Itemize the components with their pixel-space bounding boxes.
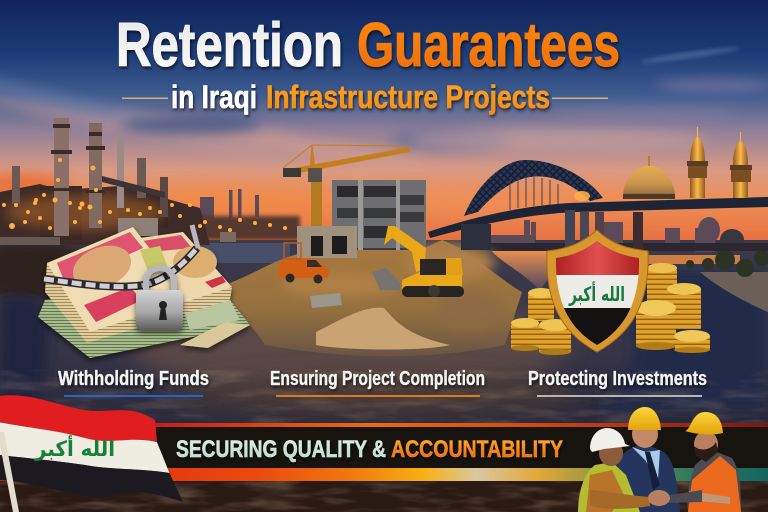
flag pole (0, 432, 19, 512)
icon: chained money stack (38, 227, 250, 358)
worker: white helmet and yellow vest (578, 428, 650, 512)
green banknotes (38, 290, 250, 358)
refinery stacks (12, 136, 168, 217)
shield takbir text: الله أكبر (568, 280, 625, 306)
flag takbir text: الله أكبر (34, 434, 115, 461)
refinery tower (86, 123, 105, 228)
coin stack (539, 319, 571, 355)
coin stack (511, 318, 539, 351)
concrete block (310, 293, 342, 308)
label: Withholding Funds: Withholding Funds (58, 368, 209, 390)
icon: Iraqi flag shield (547, 230, 648, 352)
title word: Retention: Retention (116, 11, 343, 80)
steel arch bridge (428, 160, 768, 250)
subtitle (122, 79, 608, 115)
sand piles (215, 240, 522, 356)
refinery tower (51, 118, 73, 236)
label: Ensuring Project Completion: Ensuring Project Completion (270, 368, 485, 390)
title word: Guarantees: Guarantees (357, 11, 620, 80)
distant city skyline (195, 189, 768, 252)
coin stack (647, 263, 677, 310)
subtitle: in Iraqi: in Iraqi (171, 79, 257, 115)
label: Protecting Investments: Protecting Investments (528, 368, 707, 390)
title (116, 11, 620, 80)
Iraqi flag (0, 390, 190, 512)
cash bundle edges (45, 240, 232, 343)
banner text: accountability: ACCOUNTABILITY (391, 436, 563, 463)
minaret (730, 132, 752, 198)
background: river and far bank (200, 243, 768, 312)
golden dome (623, 156, 675, 199)
orange truck (278, 243, 329, 284)
coin stack (667, 283, 701, 329)
coin stack (636, 300, 676, 350)
unfinished concrete building (297, 180, 426, 258)
refinery lights (2, 158, 287, 232)
subtitle: Infrastructure Projects: Infrastructure Projects (266, 79, 550, 115)
handshake (648, 490, 670, 506)
worker: consultant in suit (612, 407, 680, 512)
rear red banknote (140, 232, 232, 310)
background: ground and road (0, 240, 768, 512)
icon: gold coin stacks (511, 263, 710, 355)
chain (44, 225, 198, 287)
front red banknote (47, 227, 190, 332)
coin stack (674, 330, 710, 353)
light rock pile (316, 308, 450, 350)
yellow excavator (372, 226, 464, 297)
coin stack (528, 288, 554, 321)
banner: securing quality and accountability (0, 423, 768, 481)
worker: orange vest (668, 412, 741, 512)
background: sunset sky (0, 0, 768, 250)
padlock (136, 268, 183, 330)
refinery (0, 118, 287, 245)
banner text: securing quality: SECURING QUALITY & (176, 436, 386, 463)
minaret (687, 127, 708, 198)
tower crane (283, 145, 410, 226)
workers shaking hands (578, 407, 741, 512)
